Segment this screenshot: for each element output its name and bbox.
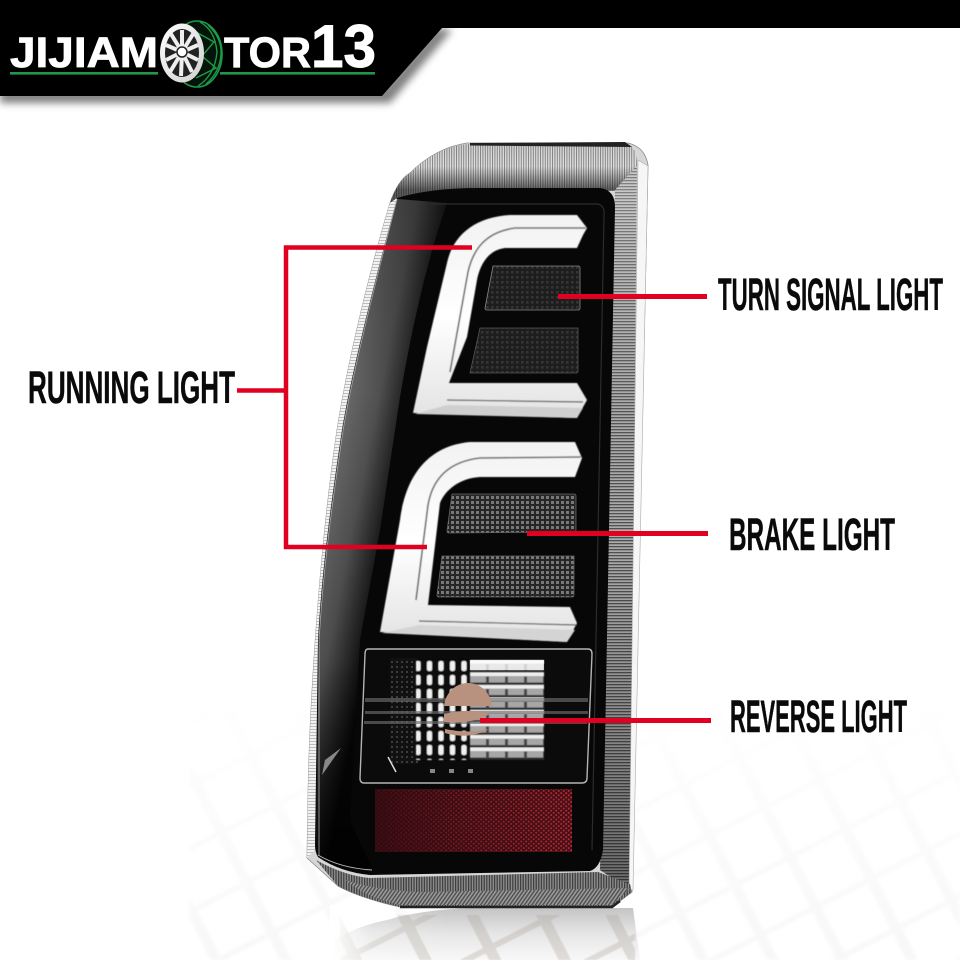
callout: brake line xyxy=(527,531,708,536)
logo wordmark right: TOR xyxy=(224,29,311,77)
brake lens upper xyxy=(447,494,576,533)
lamp outer bezel xyxy=(307,143,648,907)
black lamp body xyxy=(315,188,615,875)
turn signal lens upper xyxy=(485,266,580,310)
callout: running light bracket xyxy=(237,248,472,547)
top ribbed band xyxy=(390,142,637,203)
header banner shadow xyxy=(0,28,452,103)
red reflector xyxy=(375,789,572,852)
upper running light tube xyxy=(413,215,587,418)
right ribbed band xyxy=(600,160,648,890)
turn signal lens lower xyxy=(470,328,578,373)
amber centre xyxy=(444,682,492,736)
logo number: 13 xyxy=(311,13,376,80)
reverse light housing xyxy=(360,649,592,783)
top white highlight xyxy=(470,660,544,670)
logo tyre icon xyxy=(160,21,222,87)
brake lens lower xyxy=(437,556,574,597)
lower running light tube xyxy=(380,442,582,642)
tail light xyxy=(307,142,648,907)
logo underline xyxy=(10,72,375,75)
lamp reflection on floor xyxy=(330,905,640,960)
reverse lens dark columns xyxy=(390,658,418,764)
bottom sparkle xyxy=(430,769,473,773)
background mesh floor xyxy=(190,690,960,960)
left ribbed edge xyxy=(307,198,397,858)
callout: turn signal line xyxy=(558,294,707,299)
housing grey bands xyxy=(364,698,588,724)
logo xyxy=(10,13,376,87)
logo wordmark left: JIJIAM xyxy=(10,29,158,77)
smoked side lens xyxy=(316,199,447,870)
bottom ribbed band xyxy=(316,860,632,907)
inner frame line xyxy=(430,204,604,850)
label: running light: RUNNING LIGHT xyxy=(28,362,235,413)
callout: reverse line xyxy=(480,718,711,723)
reverse lens bright cells xyxy=(470,660,544,760)
header banner xyxy=(0,0,960,96)
reverse lens bright slits xyxy=(416,660,470,760)
